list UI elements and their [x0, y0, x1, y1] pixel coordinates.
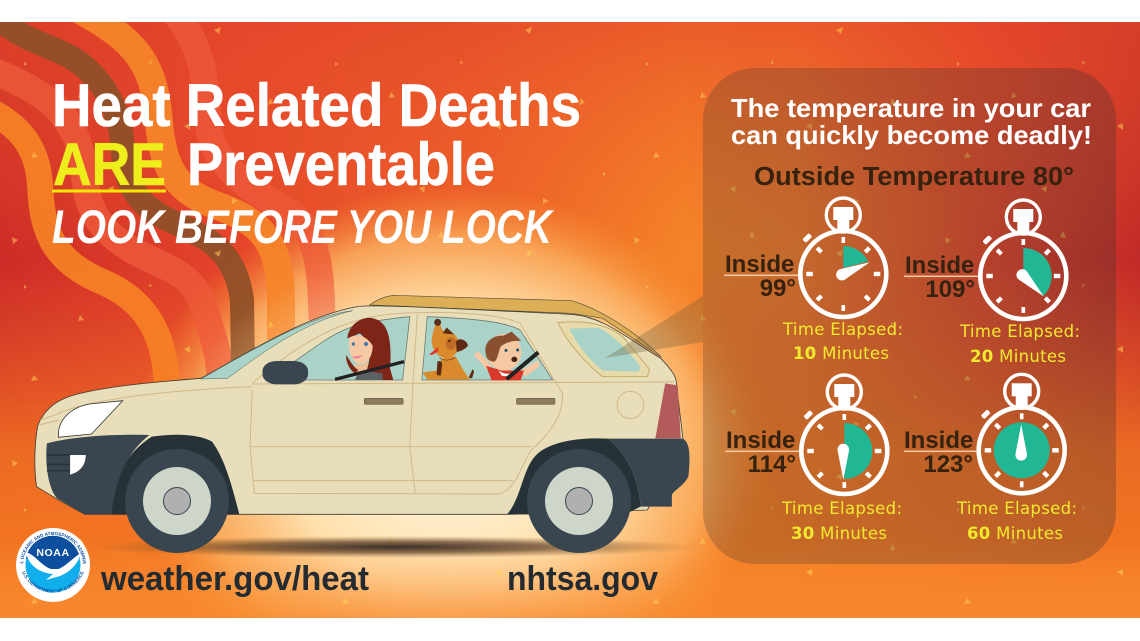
- rear bumper: [608, 439, 689, 507]
- quarter window: [570, 328, 641, 372]
- slogan: LOOK BEFORE YOU LOCK: [52, 200, 555, 253]
- panel heading: The temperature in your car: [731, 93, 1091, 123]
- front bumper: [46, 435, 150, 514]
- child: [473, 332, 539, 380]
- watch face: [979, 374, 1065, 493]
- inside temperature label: 123°: [923, 451, 973, 478]
- inside temperature label: Inside: [725, 251, 794, 278]
- title word: ARE: ARE: [53, 131, 166, 198]
- time elapsed: Time Elapsed:: [781, 499, 902, 518]
- watch face: [980, 200, 1066, 319]
- info panel: [605, 68, 1116, 564]
- inside temperature label: Inside: [905, 252, 974, 279]
- woman driver: [335, 318, 404, 380]
- time elapsed: [959, 322, 1080, 366]
- inside temperature label: 114°: [748, 451, 796, 478]
- stopwatch: 30 minutes, 114 degrees: [725, 375, 902, 543]
- front door window: [268, 317, 410, 380]
- time elapsed: [781, 499, 902, 543]
- time elapsed: 20 Minutes: [970, 347, 1066, 366]
- body lines: [39, 312, 674, 494]
- NOAA logo: U.S. DEPARTMENT OF COMMERCE: [22, 571, 84, 593]
- headline: [52, 72, 581, 253]
- inside temperature label: [724, 251, 800, 302]
- website: weather.gov/heat: weather.gov/heat: [100, 560, 369, 598]
- inside temperature label: [725, 427, 801, 478]
- time elapsed: [782, 320, 903, 363]
- quarter window frame: [558, 322, 650, 377]
- watch face: [800, 198, 886, 317]
- dog: [423, 319, 474, 380]
- time elapsed: 60 Minutes: [967, 524, 1063, 543]
- title line 1: Heat Related Deaths: [52, 72, 581, 139]
- headlight: [58, 401, 123, 437]
- car body: [35, 306, 683, 514]
- time elapsed: Time Elapsed:: [956, 499, 1077, 518]
- rear door window: [422, 317, 553, 380]
- inside temperature label: 109°: [925, 276, 975, 303]
- rear wheel arch: [507, 438, 641, 514]
- outside temperature: Outside Temperature 80°: [754, 163, 1074, 191]
- title line 2: Preventable: [187, 131, 495, 198]
- front grille and fog light: [47, 455, 71, 471]
- time elapsed: Time Elapsed:: [959, 322, 1080, 341]
- tail light: [655, 383, 681, 438]
- stopwatch: 60 minutes, 123 degrees: [904, 374, 1077, 543]
- NOAA logo: NOAA: [36, 547, 70, 559]
- car illustration: [35, 295, 689, 553]
- inside temperature label: Inside: [726, 427, 795, 454]
- inside temperature label: [904, 252, 980, 303]
- door handles: [364, 398, 555, 404]
- inside temperature label: Inside: [904, 427, 973, 454]
- stopwatch: 20 minutes, 109 degrees: [904, 200, 1080, 366]
- NOAA logo: [16, 528, 90, 602]
- ground shadow: [90, 536, 700, 558]
- front wheel: [125, 449, 229, 553]
- rear wheel: [527, 449, 631, 553]
- stopwatch: 10 minutes, 99 degrees: [724, 198, 903, 363]
- windshield: [201, 311, 353, 379]
- website: nhtsa.gov: nhtsa.gov: [507, 560, 658, 598]
- underline under ARE: [52, 190, 166, 192]
- heat waves rising from the car: [0, 10, 322, 385]
- panel pointer to car: [605, 296, 703, 358]
- time elapsed: Time Elapsed:: [782, 320, 903, 339]
- inside temperature label: [904, 427, 980, 478]
- glow over lower waves: [150, 250, 750, 470]
- front wheel arch: [112, 435, 239, 514]
- watch face: [801, 375, 887, 494]
- time elapsed: 10 Minutes: [793, 344, 889, 363]
- time elapsed: [956, 499, 1077, 543]
- roof rack: [370, 295, 662, 357]
- time elapsed: 30 Minutes: [791, 524, 887, 543]
- panel heading: can quickly become deadly!: [731, 120, 1092, 150]
- wing mirror: [263, 361, 308, 384]
- inside temperature label: 99°: [760, 275, 796, 302]
- NOAA logo: NATIONAL OCEANIC AND ATMOSPHERIC ADMINISTRATION: [20, 532, 86, 564]
- panel heading: [731, 93, 1092, 150]
